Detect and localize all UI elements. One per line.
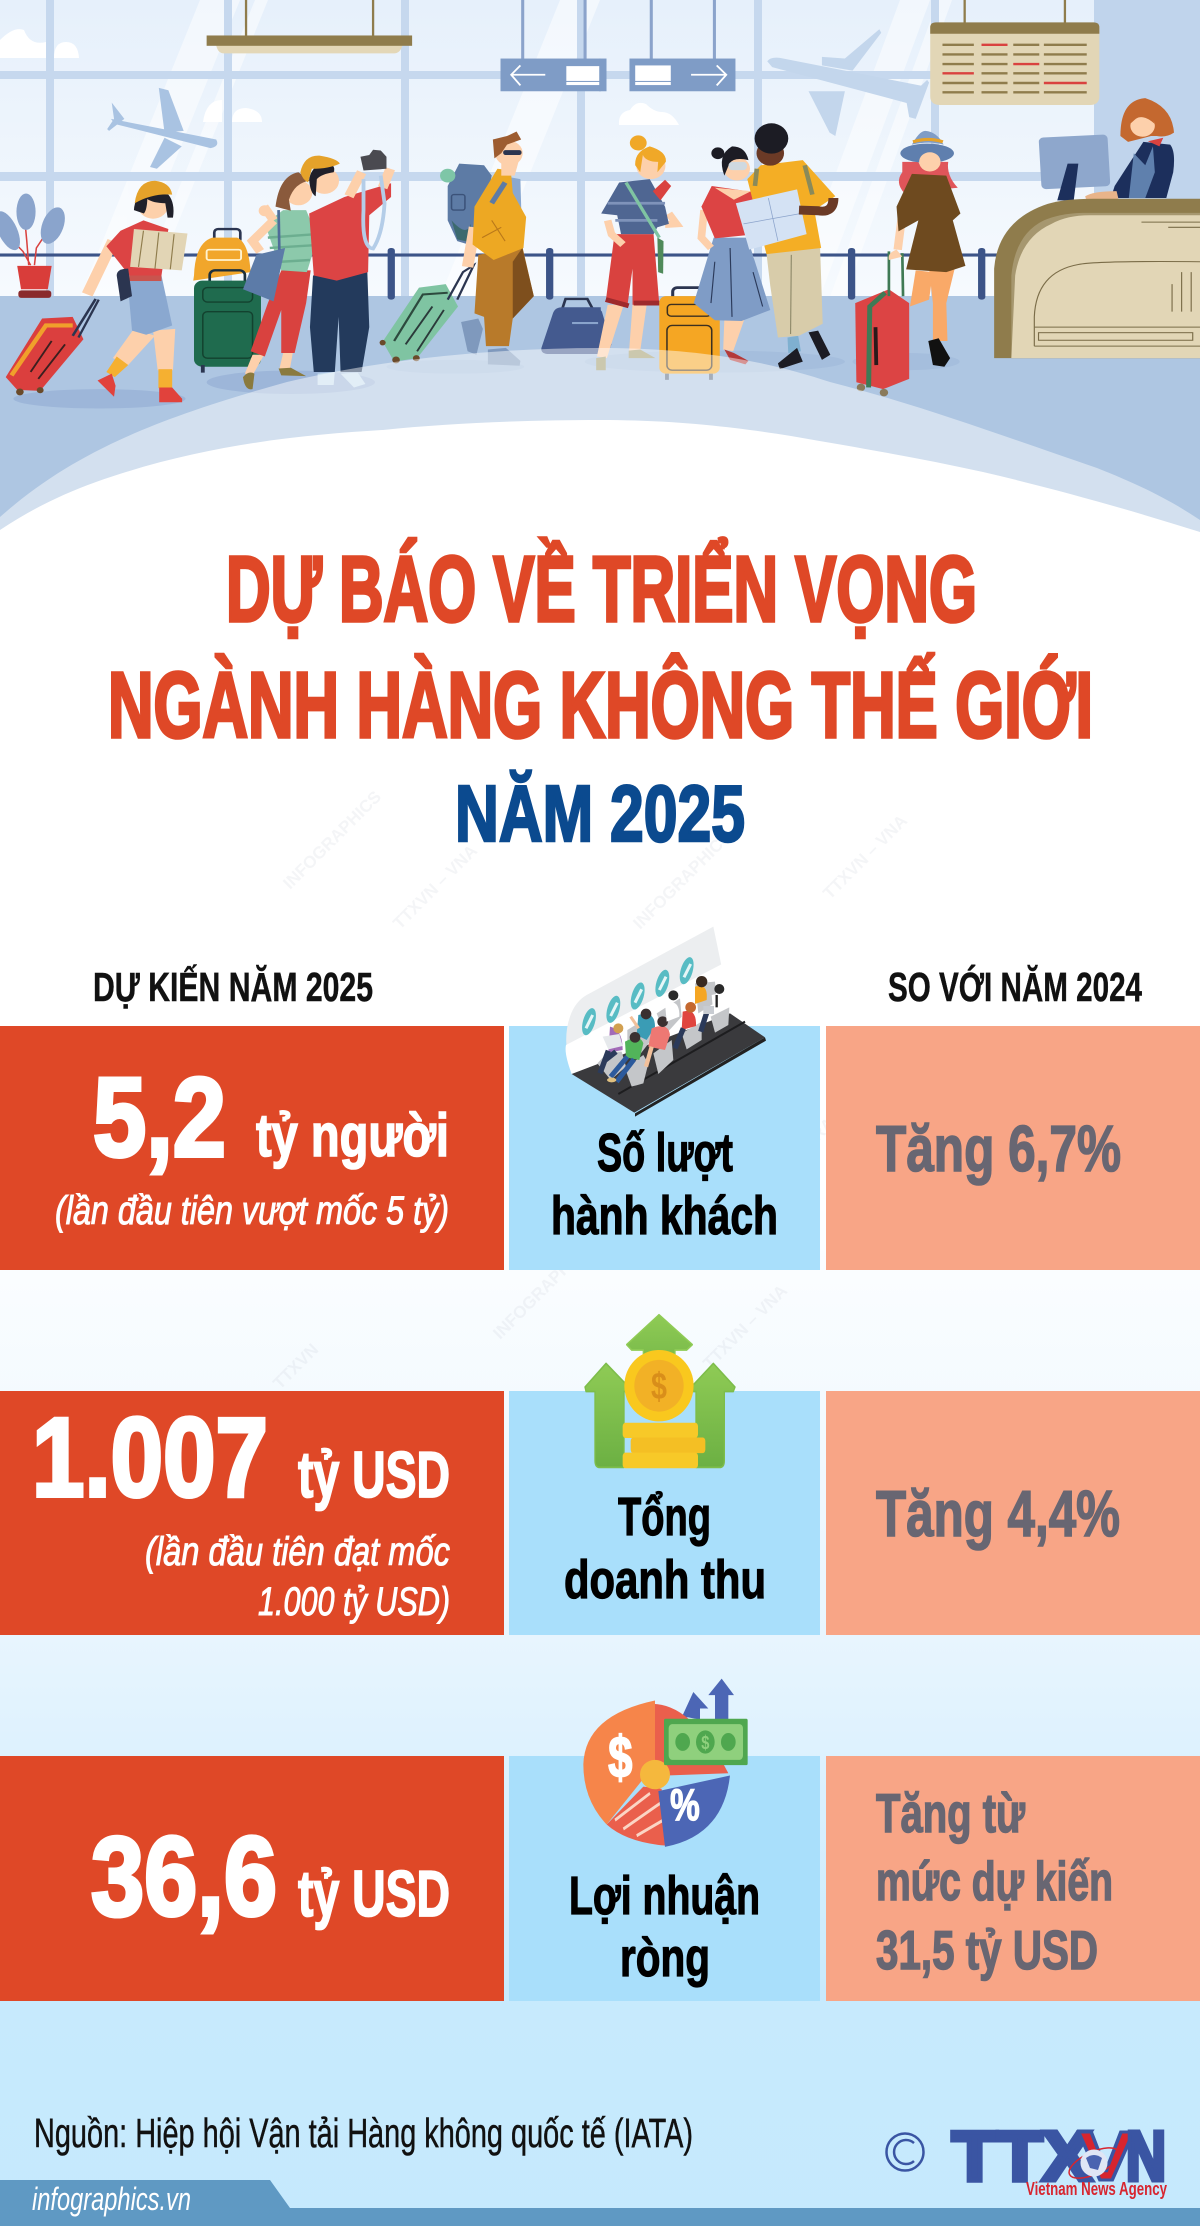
watermarks: INFOGRAPHICS xyxy=(279,787,385,893)
hanging brown sign xyxy=(207,0,412,53)
title xyxy=(108,537,1093,858)
revenue label panel: doanh thu xyxy=(564,1550,766,1610)
shadow xyxy=(585,351,845,373)
floor xyxy=(0,296,1200,540)
watermarks: TTXVN – VNA xyxy=(389,841,481,933)
wordmark: N xyxy=(1126,2117,1166,2195)
wall xyxy=(1094,0,1200,297)
icon: aircraft cabin with passengers xyxy=(566,927,766,1117)
profit comparison panel: 31,5 tỷ USD xyxy=(876,1919,1098,1981)
passengers value panel: (lần đầu tiên vượt mốc 5 tỷ) xyxy=(55,1189,449,1233)
profit comparison panel xyxy=(826,1756,1200,2001)
passengers value panel: tỷ người xyxy=(256,1102,449,1169)
yellow suitcase xyxy=(659,288,720,380)
window sky xyxy=(0,0,1094,297)
right half figures xyxy=(585,0,1200,396)
icon: pie chart with money and arrows: % xyxy=(670,1780,700,1830)
watermarks xyxy=(269,787,911,1393)
couple reading a map xyxy=(694,123,835,369)
navy bag end xyxy=(598,307,611,354)
logo: copyright and TTXVN xyxy=(886,2117,1167,2199)
column heading: left: DỰ KIẾN NĂM 2025 xyxy=(93,964,373,1010)
passengers comparison panel xyxy=(826,1026,1200,1270)
clouds xyxy=(0,29,679,125)
icon: green arrows and gold coins xyxy=(585,1315,735,1468)
revenue label panel: Tổng xyxy=(618,1487,711,1547)
revenue value panel: (lần đầu tiên đạt mốc xyxy=(145,1530,450,1574)
profit comparison panel: Tăng từ xyxy=(876,1782,1025,1844)
footer band with site tab: infographics.vn xyxy=(32,2181,191,2217)
watermarks: TTXVN – VNA xyxy=(699,1281,791,1373)
icon: pie chart with money and arrows: $ xyxy=(608,1725,632,1789)
passengers comparison panel: Tăng 6,7% xyxy=(876,1112,1121,1185)
watermarks: INFOGRAPHICS xyxy=(489,1237,595,1343)
row 2: revenue xyxy=(0,1315,1200,1635)
icon: pie chart with money and arrows: $ xyxy=(701,1731,710,1754)
wordmark: V xyxy=(1078,2117,1134,2195)
revenue value panel: tỷ USD xyxy=(298,1438,450,1511)
globe xyxy=(1065,2142,1123,2184)
flight information board xyxy=(930,0,1099,105)
check-in clerk and monitor xyxy=(1039,98,1174,200)
revenue comparison panel xyxy=(826,1391,1200,1635)
direction sign left xyxy=(501,0,601,91)
revenue label panel xyxy=(509,1391,820,1635)
passengers label panel xyxy=(509,1026,820,1270)
shadows xyxy=(13,389,186,408)
passengers label panel: Số lượt xyxy=(597,1123,733,1183)
watermarks: TTXVN xyxy=(529,1150,582,1203)
illustration: airport terminal with travellers xyxy=(0,0,1200,560)
row 1: passengers xyxy=(0,927,1200,1270)
passengers label panel: hành khách xyxy=(551,1186,778,1246)
rail xyxy=(0,253,600,257)
navy bag xyxy=(541,299,601,354)
profit value panel: tỷ USD xyxy=(298,1857,450,1930)
profit label panel: ròng xyxy=(620,1928,710,1988)
wordmark: TTX xyxy=(952,2117,1092,2195)
couple taking a selfie xyxy=(243,150,391,389)
check-in desk xyxy=(994,199,1200,358)
traveller: girl with map and red suitcase xyxy=(6,181,187,402)
watermarks: INFOGRAPHICS xyxy=(309,1137,415,1243)
icon: green arrows and gold coins: $ xyxy=(651,1365,667,1408)
plane right xyxy=(767,29,929,136)
plane left xyxy=(107,88,217,169)
watermarks: INFOGRAPHICS xyxy=(769,1077,875,1183)
profit label panel xyxy=(509,1756,820,2001)
plant xyxy=(0,194,69,298)
watermarks: INFOGRAPHICS xyxy=(629,827,735,933)
wordmark xyxy=(952,2117,1166,2195)
copyright symbol xyxy=(886,2134,924,2170)
revenue value panel xyxy=(0,1391,504,1635)
direction sign right xyxy=(599,0,735,91)
passengers value panel xyxy=(0,1026,504,1270)
luggage stack: orange bag and green suitcase xyxy=(193,229,261,373)
rail xyxy=(600,253,998,257)
profit label panel: Lợi nhuận xyxy=(569,1866,760,1926)
source note: Nguồn: Hiệp hội Vận tải Hàng không quốc tế (IATA) xyxy=(34,2110,693,2156)
window frame xyxy=(0,0,1094,297)
left half figures xyxy=(0,0,601,408)
profit value panel: 36,6 xyxy=(91,1814,277,1939)
pale floor sweep xyxy=(0,348,1200,540)
title line 3: NĂM 2025 xyxy=(455,769,745,858)
watermarks: TTXVN – VNA xyxy=(819,811,911,903)
row 3: net profit xyxy=(0,1679,1200,2001)
watermarks: TTXVN xyxy=(269,1340,322,1393)
woman with phone xyxy=(596,135,677,370)
passengers value panel: 5,2 xyxy=(93,1055,226,1180)
revenue value panel: 1.007 xyxy=(32,1395,268,1520)
man with backpack and green suitcase xyxy=(380,132,534,366)
revenue comparison panel: Tăng 4,4% xyxy=(876,1477,1120,1550)
revenue value panel: 1.000 tỷ USD) xyxy=(258,1580,450,1624)
woman in brown dress with red suitcase xyxy=(855,131,965,396)
light streaks xyxy=(80,0,952,297)
profit comparison panel: mức dự kiến xyxy=(876,1850,1113,1912)
white page curve xyxy=(0,420,1200,560)
footer band with site tab xyxy=(0,2180,1200,2226)
profit value panel xyxy=(0,1756,504,2001)
icon: pie chart with money and arrows xyxy=(583,1679,748,1847)
